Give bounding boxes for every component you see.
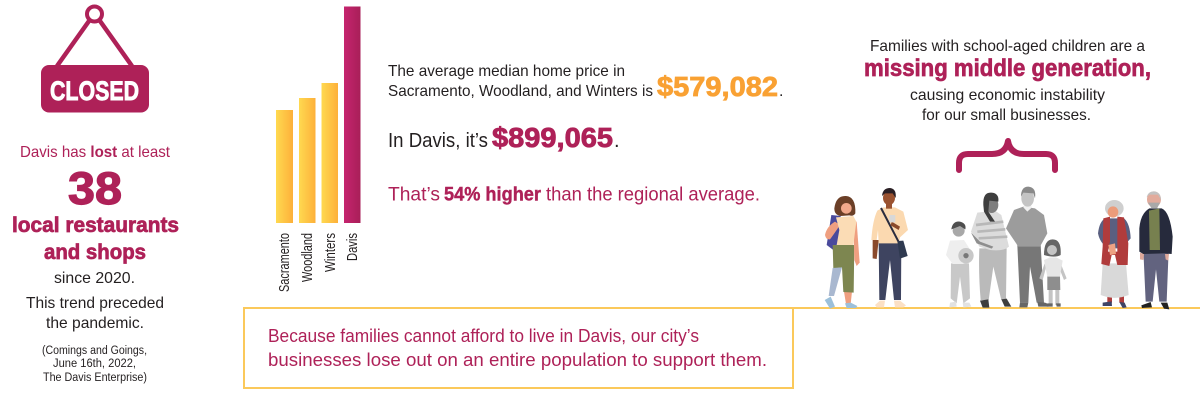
icon: closed sign: CLOSED <box>50 76 139 106</box>
bar chart: home prices <box>276 6 361 292</box>
man with phone and bag <box>871 188 908 307</box>
panel: missing middle heading: missing middle generation, <box>864 55 1151 82</box>
text: source citation: (Comings and Goings, <box>42 345 147 357</box>
callout: businesses lose out: Because families cannot afford to live in Davis, our city’s <box>268 325 699 346</box>
icon: closed sign <box>41 6 149 112</box>
text: Davis has lost at least: Davis has lost at least <box>20 144 171 161</box>
bar chart: home prices: Davis <box>344 233 361 261</box>
text: 54 percent higher: than the regional average. <box>546 184 760 206</box>
panel: price comparison text <box>388 63 783 206</box>
panel: missing middle heading <box>864 38 1151 124</box>
text: 54 percent higher <box>388 184 760 206</box>
period: . <box>614 130 620 152</box>
text: source citation <box>42 345 147 384</box>
bar chart: home prices: Woodland <box>299 233 316 282</box>
people: young adults <box>825 188 908 309</box>
boy with ball <box>946 222 974 307</box>
text: In Davis: In Davis, it’s <box>388 130 488 152</box>
text: trend preceded pandemic <box>26 295 164 332</box>
period: . <box>779 83 783 100</box>
text: source citation: The Davis Enterprise) <box>43 372 147 384</box>
older woman <box>1098 200 1131 308</box>
man in sweater <box>1006 187 1052 307</box>
pregnant woman <box>971 193 1011 308</box>
people: missing middle family <box>946 187 1067 308</box>
text: trend preceded pandemic: This trend preceded <box>26 295 164 312</box>
number: 38: 38 <box>68 163 122 214</box>
people: older adults <box>1098 191 1173 309</box>
number: regional price: $579,082 <box>657 71 778 102</box>
panel: missing middle heading: causing economic instability <box>910 87 1105 104</box>
text: 54 percent higher: That’s <box>388 184 440 206</box>
panel: missing middle heading: for our small businesses. <box>922 107 1091 124</box>
older man <box>1139 191 1173 309</box>
callout: businesses lose out <box>244 308 1200 388</box>
bar chart: home prices: Sacramento <box>276 233 293 292</box>
bar chart: home prices: Winters <box>322 233 339 272</box>
woman with backpack <box>825 196 860 309</box>
text: average median price: The average median home price in <box>388 63 625 80</box>
text: trend preceded pandemic: the pandemic. <box>46 315 144 332</box>
text: average median price: Sacramento, Woodland, and Winters is <box>388 83 653 100</box>
text: source citation: June 16th, 2022, <box>53 358 136 370</box>
text: average median price <box>388 63 653 100</box>
girl <box>1039 239 1067 307</box>
text: since 2020: since 2020. <box>54 270 135 287</box>
text: local restaurants: local restaurants <box>12 214 179 237</box>
panel: missing middle heading: Families with school-aged children are a <box>870 38 1145 55</box>
icon: curly brace <box>959 141 1055 170</box>
panel: closed businesses <box>12 6 179 384</box>
number: Davis price: $899,065 <box>492 122 613 153</box>
text: 54 percent higher: 54% higher <box>444 184 541 206</box>
text: and shops: and shops <box>44 241 146 264</box>
callout: businesses lose out: businesses lose out on an entire population to support them. <box>268 349 767 370</box>
